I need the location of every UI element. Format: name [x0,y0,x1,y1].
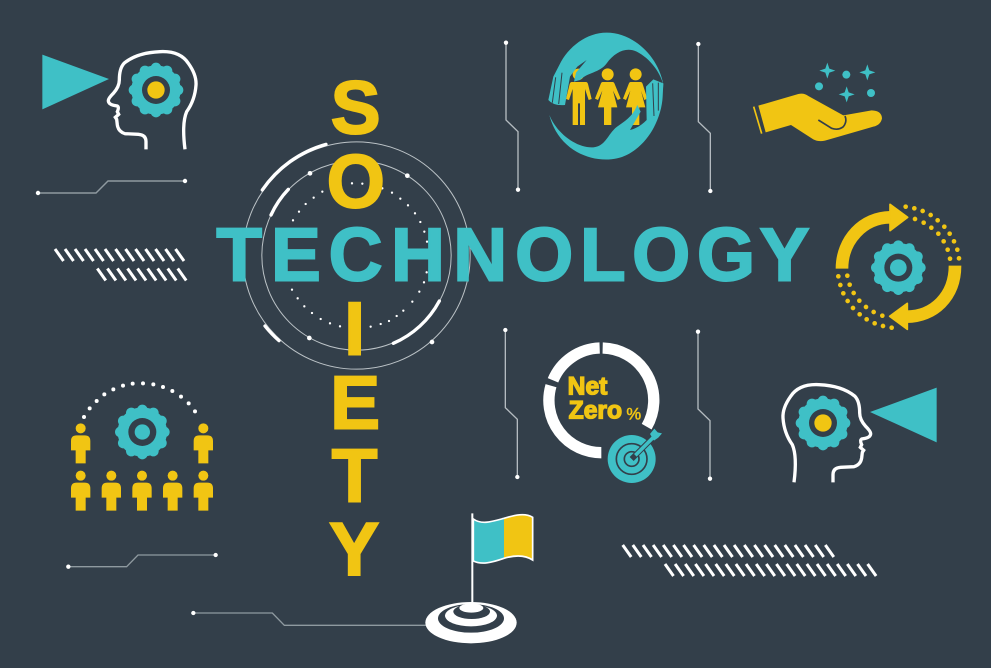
icon: left head with gear and triangle [42,52,196,149]
icon: flag on target [425,513,533,643]
circuit line: to flag [191,611,428,625]
hand [758,94,882,141]
target [608,435,656,483]
flag [473,518,504,563]
target base [425,602,517,643]
icon: cycle arrows with gear [838,204,959,329]
circuit line: upper left [36,179,187,195]
hands [548,33,664,160]
central target rings [243,142,470,369]
net zero label: % [626,404,641,423]
circuit lines: top centre [504,40,712,193]
net zero label [568,374,641,424]
net zero label: Zero [569,397,622,424]
dotted arcs [838,207,959,328]
icon: hand with sparkles [754,63,882,141]
circuit lines: lower centre [503,328,712,481]
hatch marks: left [55,249,186,280]
icon: hands holding people [548,33,664,160]
net zero label: Net [568,374,607,401]
dotted arc [84,383,195,417]
sparkles [815,63,875,102]
cuff [754,107,762,134]
hatch marks: right [623,545,876,576]
pole [469,513,475,604]
people [71,423,213,511]
icon: right head with gear and triangle [783,385,937,482]
people [566,68,647,125]
vertical word: society: SOIETY [327,65,385,591]
horizontal word: technology: TECHNOLOGY [216,212,809,296]
icon: people group with gear [71,383,213,511]
icon: net zero gauge with target [549,348,662,483]
gauge ring [549,348,654,453]
circuit line: lower left [66,553,218,569]
arrows [842,217,891,269]
